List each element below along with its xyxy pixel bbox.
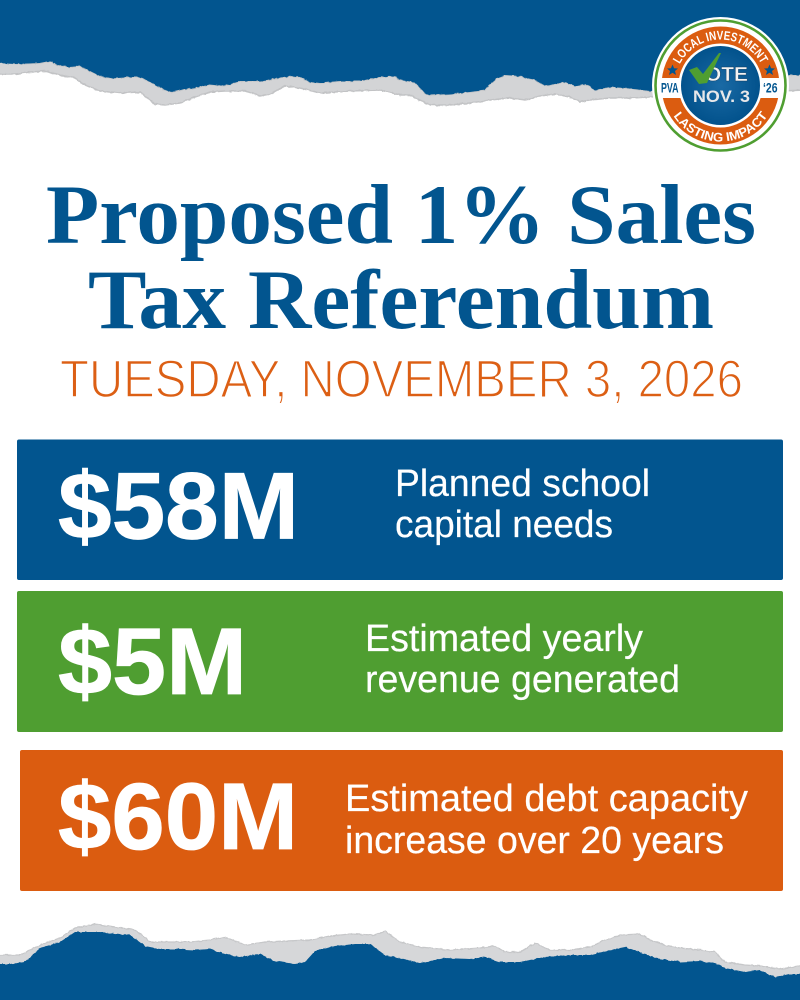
badge: right star — [764, 64, 775, 75]
description: estimated debt capacity increase — [345, 778, 748, 862]
panel: yearly revenue — [17, 591, 783, 732]
badge: bottom curved text: LASTING IMPACT — [674, 110, 766, 142]
title: Tax Referendum — [88, 253, 714, 347]
description: estimated yearly revenue generated: Estimated yearly — [365, 618, 643, 660]
description: planned school capital needs: capital needs — [395, 504, 613, 546]
description: planned school capital needs: Planned school — [395, 463, 650, 505]
top torn paper edge — [0, 60, 800, 105]
description: estimated debt capacity increase: Estimated debt capacity — [345, 778, 748, 820]
badge: check mark forming the V — [689, 53, 721, 84]
description: estimated yearly revenue generated — [365, 618, 680, 701]
stat: $58M: $58M — [58, 454, 299, 560]
bottom torn paper edge — [0, 924, 800, 980]
description: estimated debt capacity increase: increase over 20 years — [345, 820, 724, 862]
top blue band — [0, 0, 800, 95]
badge: left star — [667, 64, 678, 75]
description: estimated yearly revenue generated: revenue generated — [365, 659, 680, 701]
stat: $60M: $60M — [58, 764, 298, 870]
bottom blue band — [0, 932, 800, 1000]
title: Proposed 1% Sales — [46, 168, 756, 262]
badge: white ribbon — [660, 78, 781, 98]
badge: VOTE text: OTE — [705, 64, 748, 86]
stat: $5M: $5M — [58, 609, 247, 715]
badge: NOV. 3 text: NOV. 3 — [693, 88, 750, 106]
badge: '26 label: ‘26 — [763, 80, 778, 96]
badge: vote Nov. 3 — [652, 17, 789, 152]
badge: top curved text: LOCAL INVESTMENT — [672, 30, 768, 64]
description: planned school capital needs — [395, 463, 650, 546]
badge: PVA label: PVA — [661, 80, 678, 96]
title — [46, 168, 756, 347]
panel: debt capacity — [20, 750, 783, 891]
panel: school capital needs — [17, 440, 783, 580]
